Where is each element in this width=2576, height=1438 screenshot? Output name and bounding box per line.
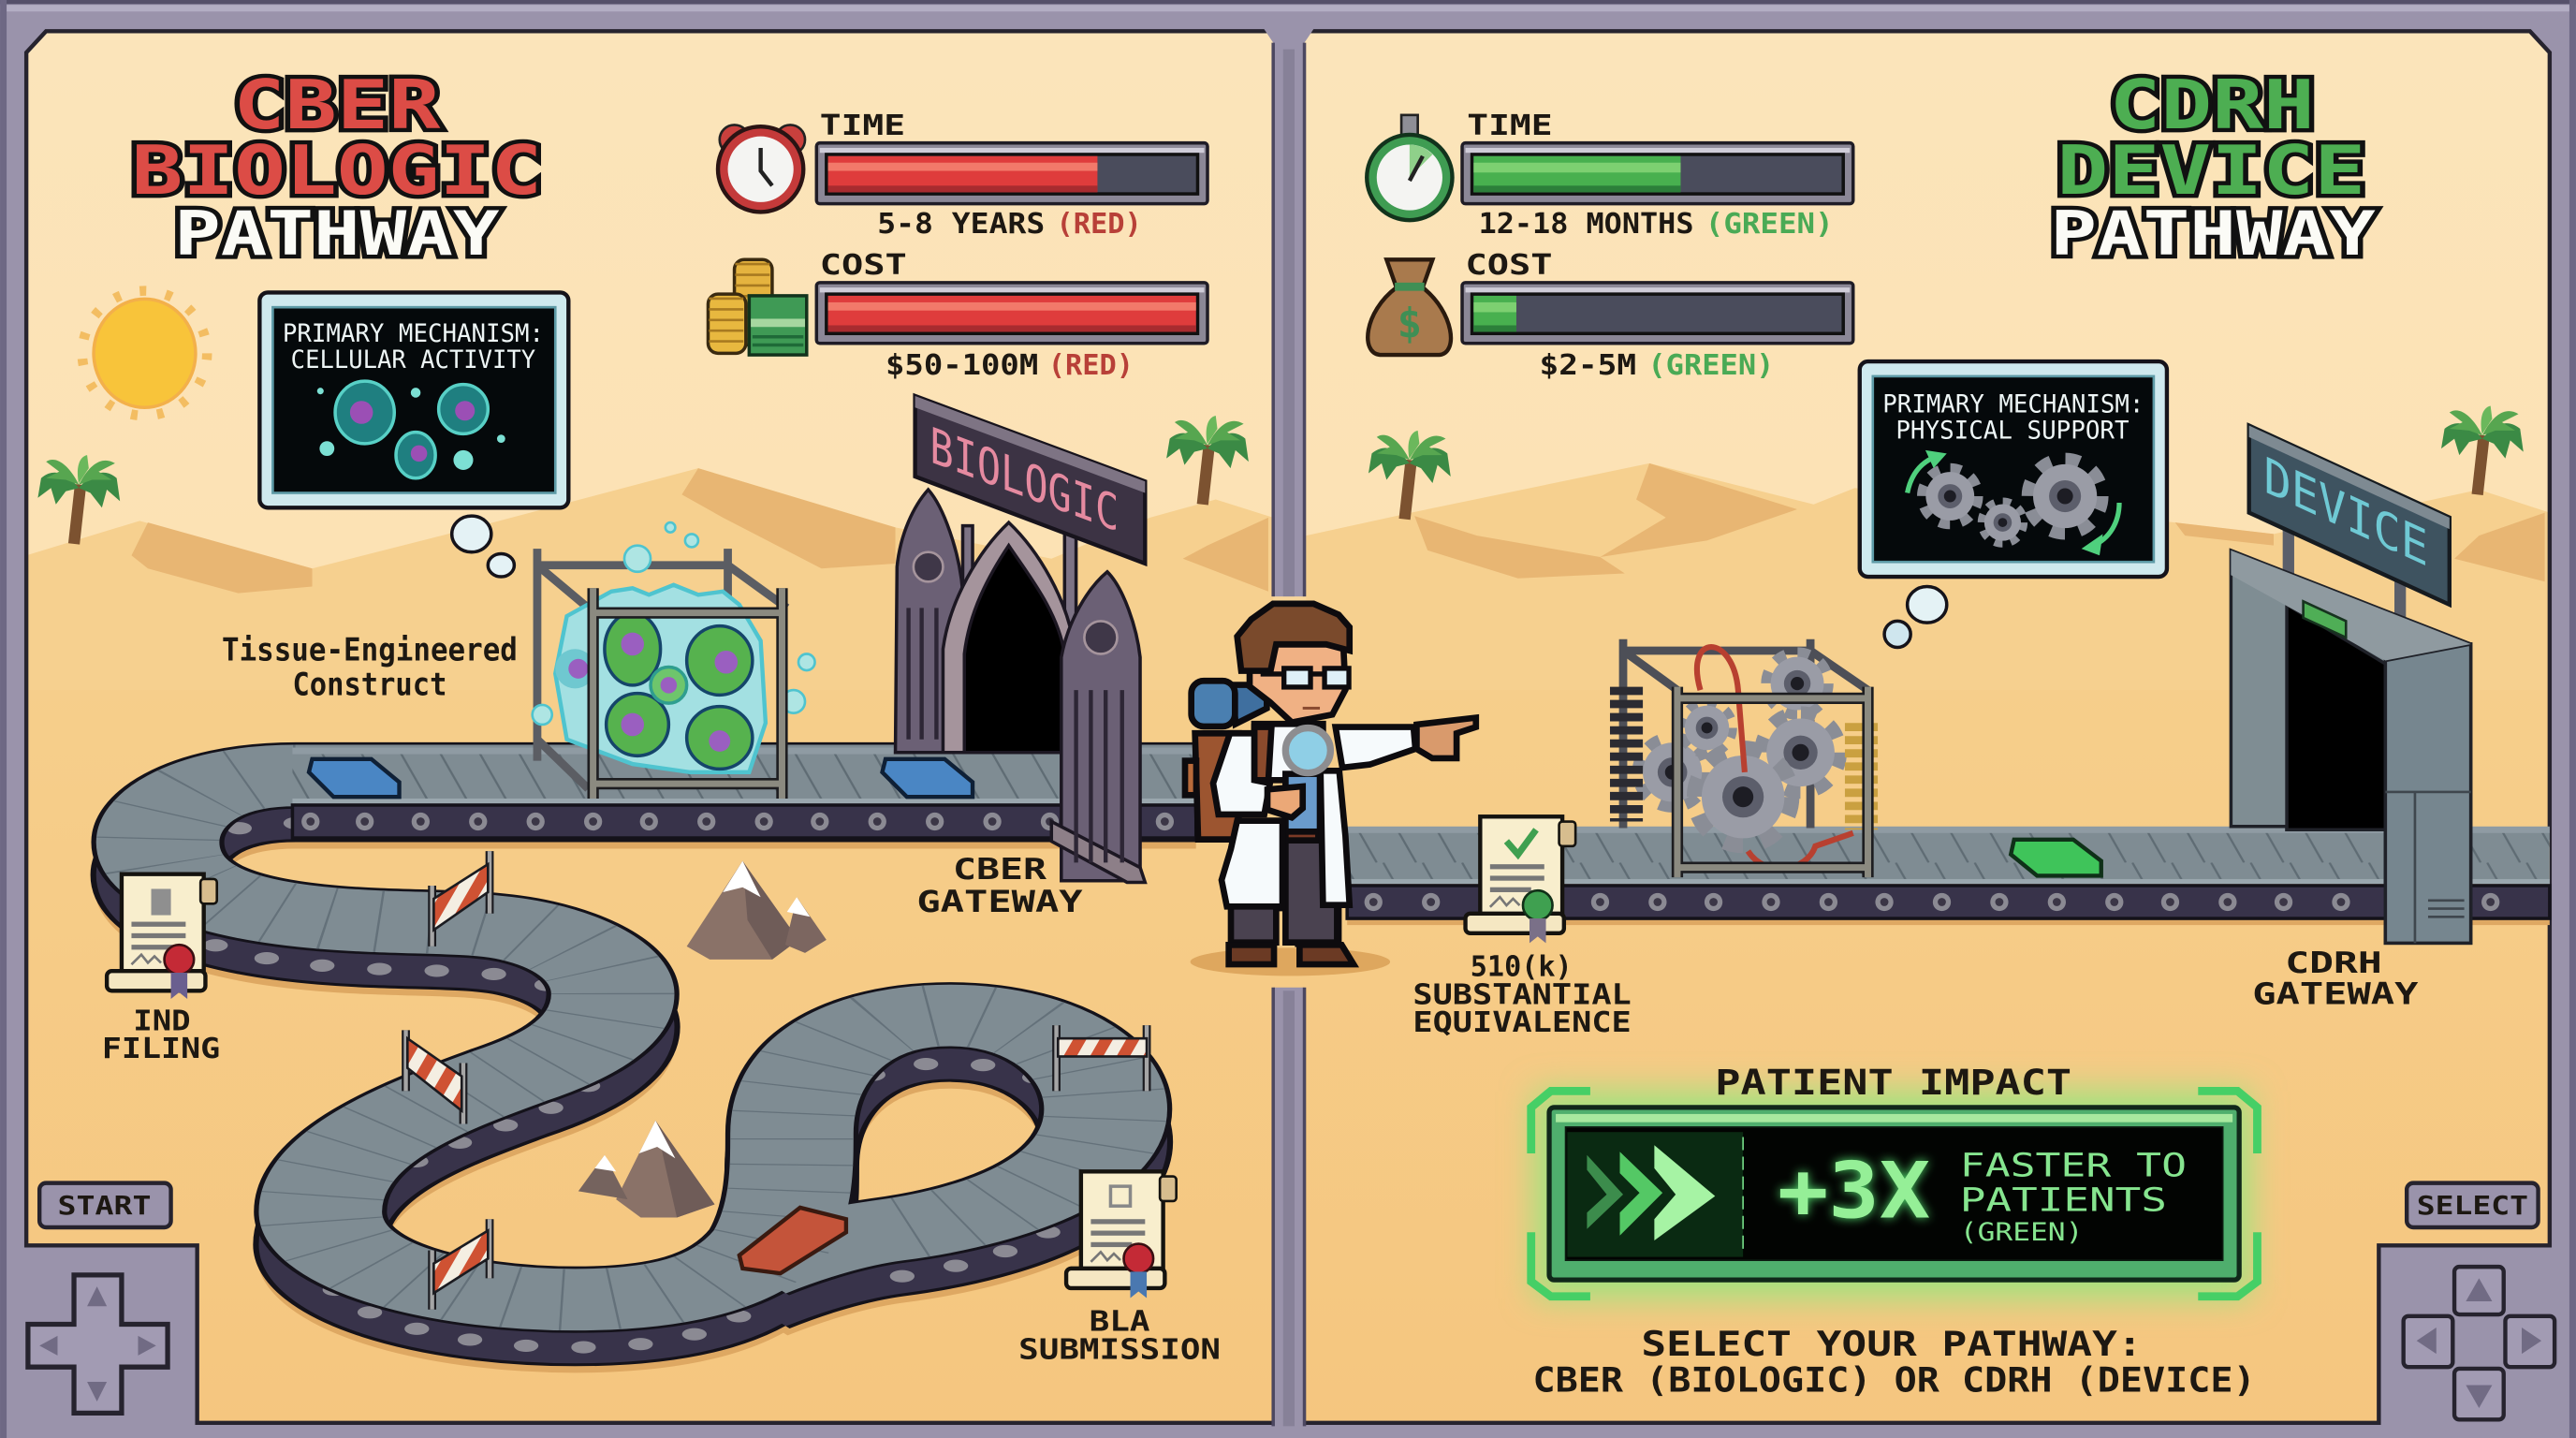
title: CDRH device pathway <box>2050 66 2376 270</box>
center divider lower <box>1273 988 1305 1434</box>
block: blue right <box>883 759 973 797</box>
stat: left time: (RED) <box>1057 208 1142 241</box>
screen: physical support: PRIMARY MECHANISM: <box>1882 391 2144 419</box>
device gate <box>2231 426 2471 943</box>
patient impact panel: (GREEN) <box>1960 1219 2083 1247</box>
label: 510(k) substantial equivalence: EQUIVALENCE <box>1412 1006 1632 1039</box>
d-pad right <box>2404 1267 2554 1419</box>
stat: left cost: COST <box>820 249 907 282</box>
legs and shoes <box>1229 840 1354 964</box>
frame <box>1549 1108 2239 1280</box>
chevron box <box>1567 1132 1743 1257</box>
barrier 1 <box>432 851 490 946</box>
d-pad left <box>28 1275 168 1413</box>
button: select: SELECT <box>2417 1192 2528 1221</box>
sign: BIOLOGIC: BIOLOGIC <box>929 416 1119 544</box>
button: start: START <box>57 1192 152 1221</box>
mountains bottom <box>578 1121 714 1217</box>
backpack <box>1185 681 1266 840</box>
label: tissue-engineered construct: Tissue-Engineered <box>222 632 518 669</box>
stat: right time: TIME <box>1467 110 1553 142</box>
gothic towers and arch <box>896 490 1145 882</box>
hair <box>1237 604 1350 671</box>
straight belt section <box>292 748 1196 838</box>
label: tissue-engineered construct <box>222 632 518 703</box>
label: CDRH gateway: CDRH <box>2285 946 2382 980</box>
progress bar <box>816 283 1208 344</box>
value: +3X <box>1778 1146 1930 1236</box>
label: BLA submission: SUBMISSION <box>1018 1333 1221 1366</box>
biologic gate <box>896 396 1145 882</box>
label: BLA submission <box>1018 1306 1221 1366</box>
scroll: IND filing <box>107 874 217 999</box>
barrier 4 <box>1057 1025 1147 1091</box>
magnifier <box>1285 728 1330 773</box>
sign posts <box>2289 526 2400 633</box>
head <box>1250 644 1345 723</box>
patient impact panel <box>1531 1062 2257 1298</box>
title: CBER biologic pathway: BIOLOGIC <box>131 131 542 210</box>
icon: palm tree right near <box>1368 431 1451 520</box>
screen: physical support: PHYSICAL SUPPORT <box>1895 418 2130 446</box>
scroll: 510(k) <box>1466 816 1575 943</box>
gate frame <box>2231 550 2471 943</box>
green halo <box>1534 1091 2250 1298</box>
center divider upper <box>1264 28 1314 596</box>
stat: left time: TIME <box>820 110 905 142</box>
raised arm and hand <box>1213 733 1303 817</box>
front frame <box>1677 687 1868 877</box>
icon: palm tree left far <box>37 455 120 544</box>
button: start <box>39 1183 171 1227</box>
stat: right time <box>1367 110 1853 241</box>
block: red <box>739 1208 846 1273</box>
scientist character <box>1185 604 1476 976</box>
stat: left time <box>718 110 1208 241</box>
progress bar <box>816 143 1208 204</box>
stat: right time: 12-18 MONTHS <box>1479 208 1693 241</box>
thought bubbles right <box>1884 587 1947 647</box>
call to action: CBER (BIOLOGIC) OR CDRH (DEVICE) <box>1532 1360 2256 1401</box>
patient impact panel: +3X <box>1778 1146 1930 1236</box>
glasses <box>1261 668 1349 687</box>
screen: cellular activity: PRIMARY MECHANISM: <box>283 320 544 348</box>
serpentine conveyor <box>158 748 1196 1347</box>
progress bar <box>1462 283 1853 344</box>
icon: money bag: $ <box>1398 300 1422 347</box>
tissue-engineered construct <box>533 522 815 799</box>
button: select <box>2407 1183 2539 1227</box>
stat: left cost: (RED) <box>1048 349 1134 382</box>
bubbles <box>533 522 815 725</box>
title: CBER biologic pathway: CBER <box>233 66 441 144</box>
springs <box>1617 687 1636 822</box>
call to action <box>1532 1324 2256 1401</box>
icon: stopwatch <box>1367 115 1453 220</box>
cell mass <box>555 585 766 772</box>
label: CBER gateway: CBER <box>953 853 1047 887</box>
label: IND filing: IND <box>133 1005 191 1037</box>
icon: palm tree left near gate <box>1166 416 1249 505</box>
progress bar <box>1462 143 1853 204</box>
sign: DEVICE <box>2249 426 2450 605</box>
label: IND filing <box>102 1005 220 1065</box>
ground shadow <box>1191 947 1390 976</box>
stat: left cost: $50-100M <box>886 349 1038 382</box>
patient impact panel: PATIENTS <box>1960 1181 2167 1219</box>
cells <box>317 381 505 478</box>
stat: right cost: COST <box>1466 249 1553 282</box>
gears <box>1638 653 1840 845</box>
screen: cellular activity <box>259 292 568 507</box>
screen: physical support <box>1860 361 2167 577</box>
dunes: left panel <box>28 468 1273 604</box>
back frame <box>1623 639 1868 829</box>
front frame <box>593 588 782 799</box>
right conveyor <box>1347 827 2550 925</box>
corner brackets <box>1531 1091 2257 1297</box>
label: 510(k) substantial equivalence <box>1412 950 1632 1039</box>
stat: left cost <box>708 249 1208 382</box>
description: FASTER TO <box>1960 1147 2187 1185</box>
title: CDRH device pathway: CDRH <box>2110 66 2315 144</box>
heading: PATIENT IMPACT <box>1715 1062 2071 1103</box>
wires <box>1697 647 1853 869</box>
title: CDRH device pathway: PATHWAY <box>2050 199 2376 270</box>
pointing arm and hand <box>1336 718 1476 768</box>
icon: coins and cash <box>708 259 807 355</box>
icon: alarm clock <box>718 125 805 212</box>
block: green <box>2011 840 2101 875</box>
call to action: SELECT YOUR PATHWAY: <box>1641 1324 2143 1364</box>
title: CBER biologic pathway: PATHWAY <box>174 199 500 270</box>
stat: right cost: $2-5M <box>1540 349 1636 382</box>
label: BLA submission: BLA <box>1090 1306 1150 1339</box>
icon: sun <box>82 291 207 416</box>
title: CBER biologic pathway <box>131 66 542 270</box>
title: CDRH device pathway: DEVICE <box>2056 131 2365 210</box>
label: tissue-engineered construct: Construct <box>292 666 446 703</box>
screen: cellular activity: CELLULAR ACTIVITY <box>291 346 535 374</box>
label: CBER gateway: GATEWAY <box>916 886 1083 919</box>
label: CBER gateway <box>916 853 1083 919</box>
icon: money bag <box>1368 259 1451 355</box>
label: CDRH gateway: GATEWAY <box>2252 977 2418 1011</box>
dunes: right panel <box>1307 462 2548 604</box>
barrier 2 <box>406 1030 463 1123</box>
mouth <box>1303 707 1320 710</box>
thought bubbles left <box>452 516 514 577</box>
mountains top <box>687 861 827 960</box>
block: blue left <box>309 759 400 797</box>
sign: DEVICE: DEVICE <box>2263 447 2428 580</box>
barrier 3 <box>432 1219 490 1310</box>
stat: left time: 5-8 YEARS <box>877 208 1045 241</box>
back frame <box>537 549 787 788</box>
lab coat and shirt <box>1222 724 1350 906</box>
label: IND filing: FILING <box>102 1033 220 1065</box>
gears <box>1908 450 2119 555</box>
stat: right time: (GREEN) <box>1705 208 1834 241</box>
label: 510(k) substantial equivalence: SUBSTANTIAL <box>1412 978 1632 1011</box>
stat: right cost <box>1368 249 1853 382</box>
scroll: BLA submission <box>1066 1171 1177 1298</box>
label: CDRH gateway <box>2252 946 2418 1011</box>
stat: right cost: (GREEN) <box>1647 349 1774 382</box>
label: 510(k) substantial equivalence: 510(k) <box>1471 950 1573 983</box>
gear machine <box>1623 639 1868 877</box>
icon: palm tree right far <box>2441 405 2524 494</box>
